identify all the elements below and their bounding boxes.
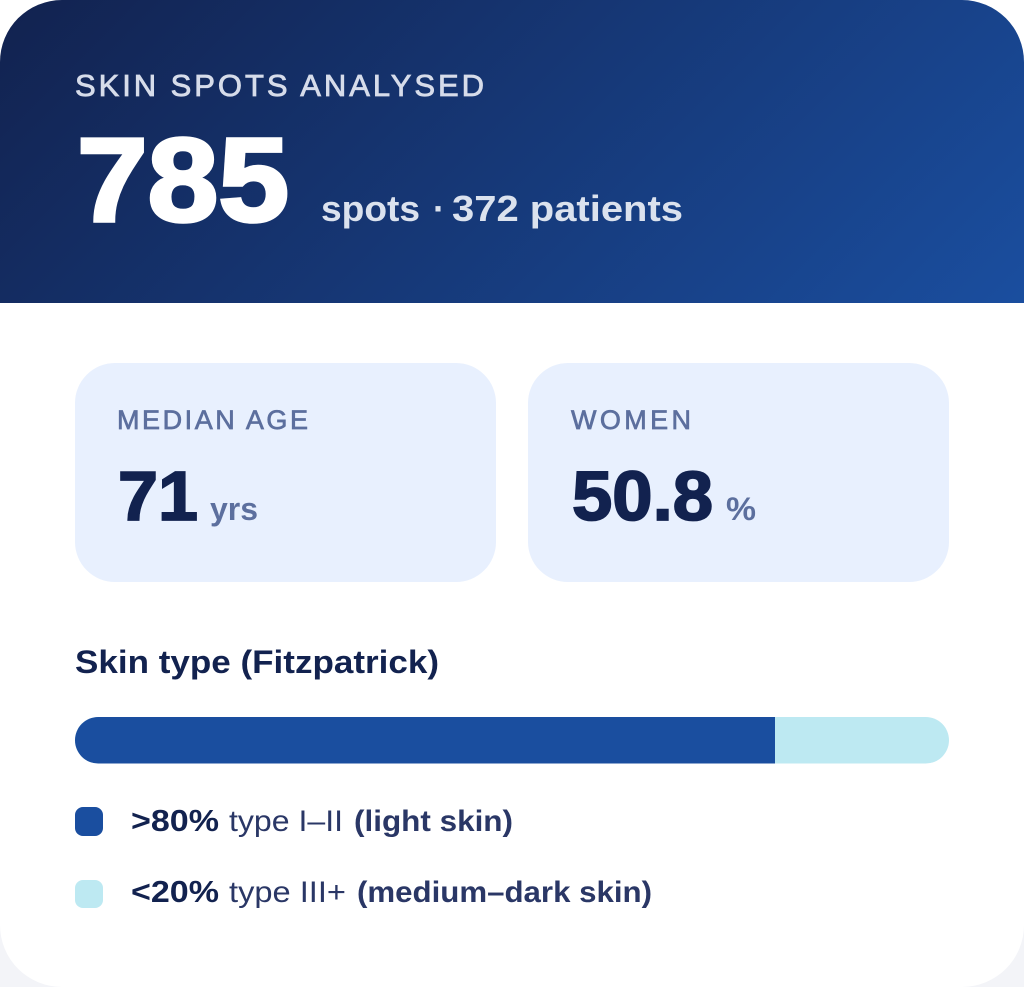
label: median age: MEDIAN AGE bbox=[117, 405, 308, 435]
panel: women bbox=[528, 363, 949, 582]
legend: type I-II: type I–II bbox=[229, 805, 343, 838]
legend: type I-II: >80% bbox=[131, 803, 219, 838]
value: 71 yrs: yrs bbox=[210, 491, 258, 527]
value: 50.8 percent: % bbox=[726, 491, 756, 527]
big number: 785: 785 bbox=[77, 114, 289, 247]
subtitle: spots and patients: 372 patients bbox=[452, 188, 683, 229]
subtitle: spots and patients: · bbox=[433, 188, 445, 229]
panel: median age bbox=[75, 363, 496, 582]
value: 50.8 percent: 50.8 bbox=[572, 457, 713, 535]
legend: type I-II: (light skin) bbox=[354, 805, 513, 838]
heading: skin type: Skin type (Fitzpatrick) bbox=[75, 644, 439, 680]
heading: skin spots analysed: SKIN SPOTS ANALYSED bbox=[75, 68, 484, 103]
legend: type III+ bbox=[75, 874, 652, 909]
legend: type III+: <20% bbox=[131, 874, 219, 909]
legend: type I-II bbox=[75, 803, 513, 838]
subtitle: spots and patients: spots bbox=[321, 188, 420, 229]
legend: type III+: type III+ bbox=[229, 876, 346, 909]
panel: header bbox=[0, 0, 1024, 303]
value: 71 yrs: 71 bbox=[118, 457, 198, 535]
value: 71 yrs bbox=[118, 457, 258, 535]
legend: type III+: (medium–dark skin) bbox=[357, 876, 652, 909]
subtitle: spots and patients bbox=[321, 188, 683, 229]
stacked bar: skin type split bbox=[75, 717, 949, 764]
label: women: WOMEN bbox=[571, 405, 691, 435]
